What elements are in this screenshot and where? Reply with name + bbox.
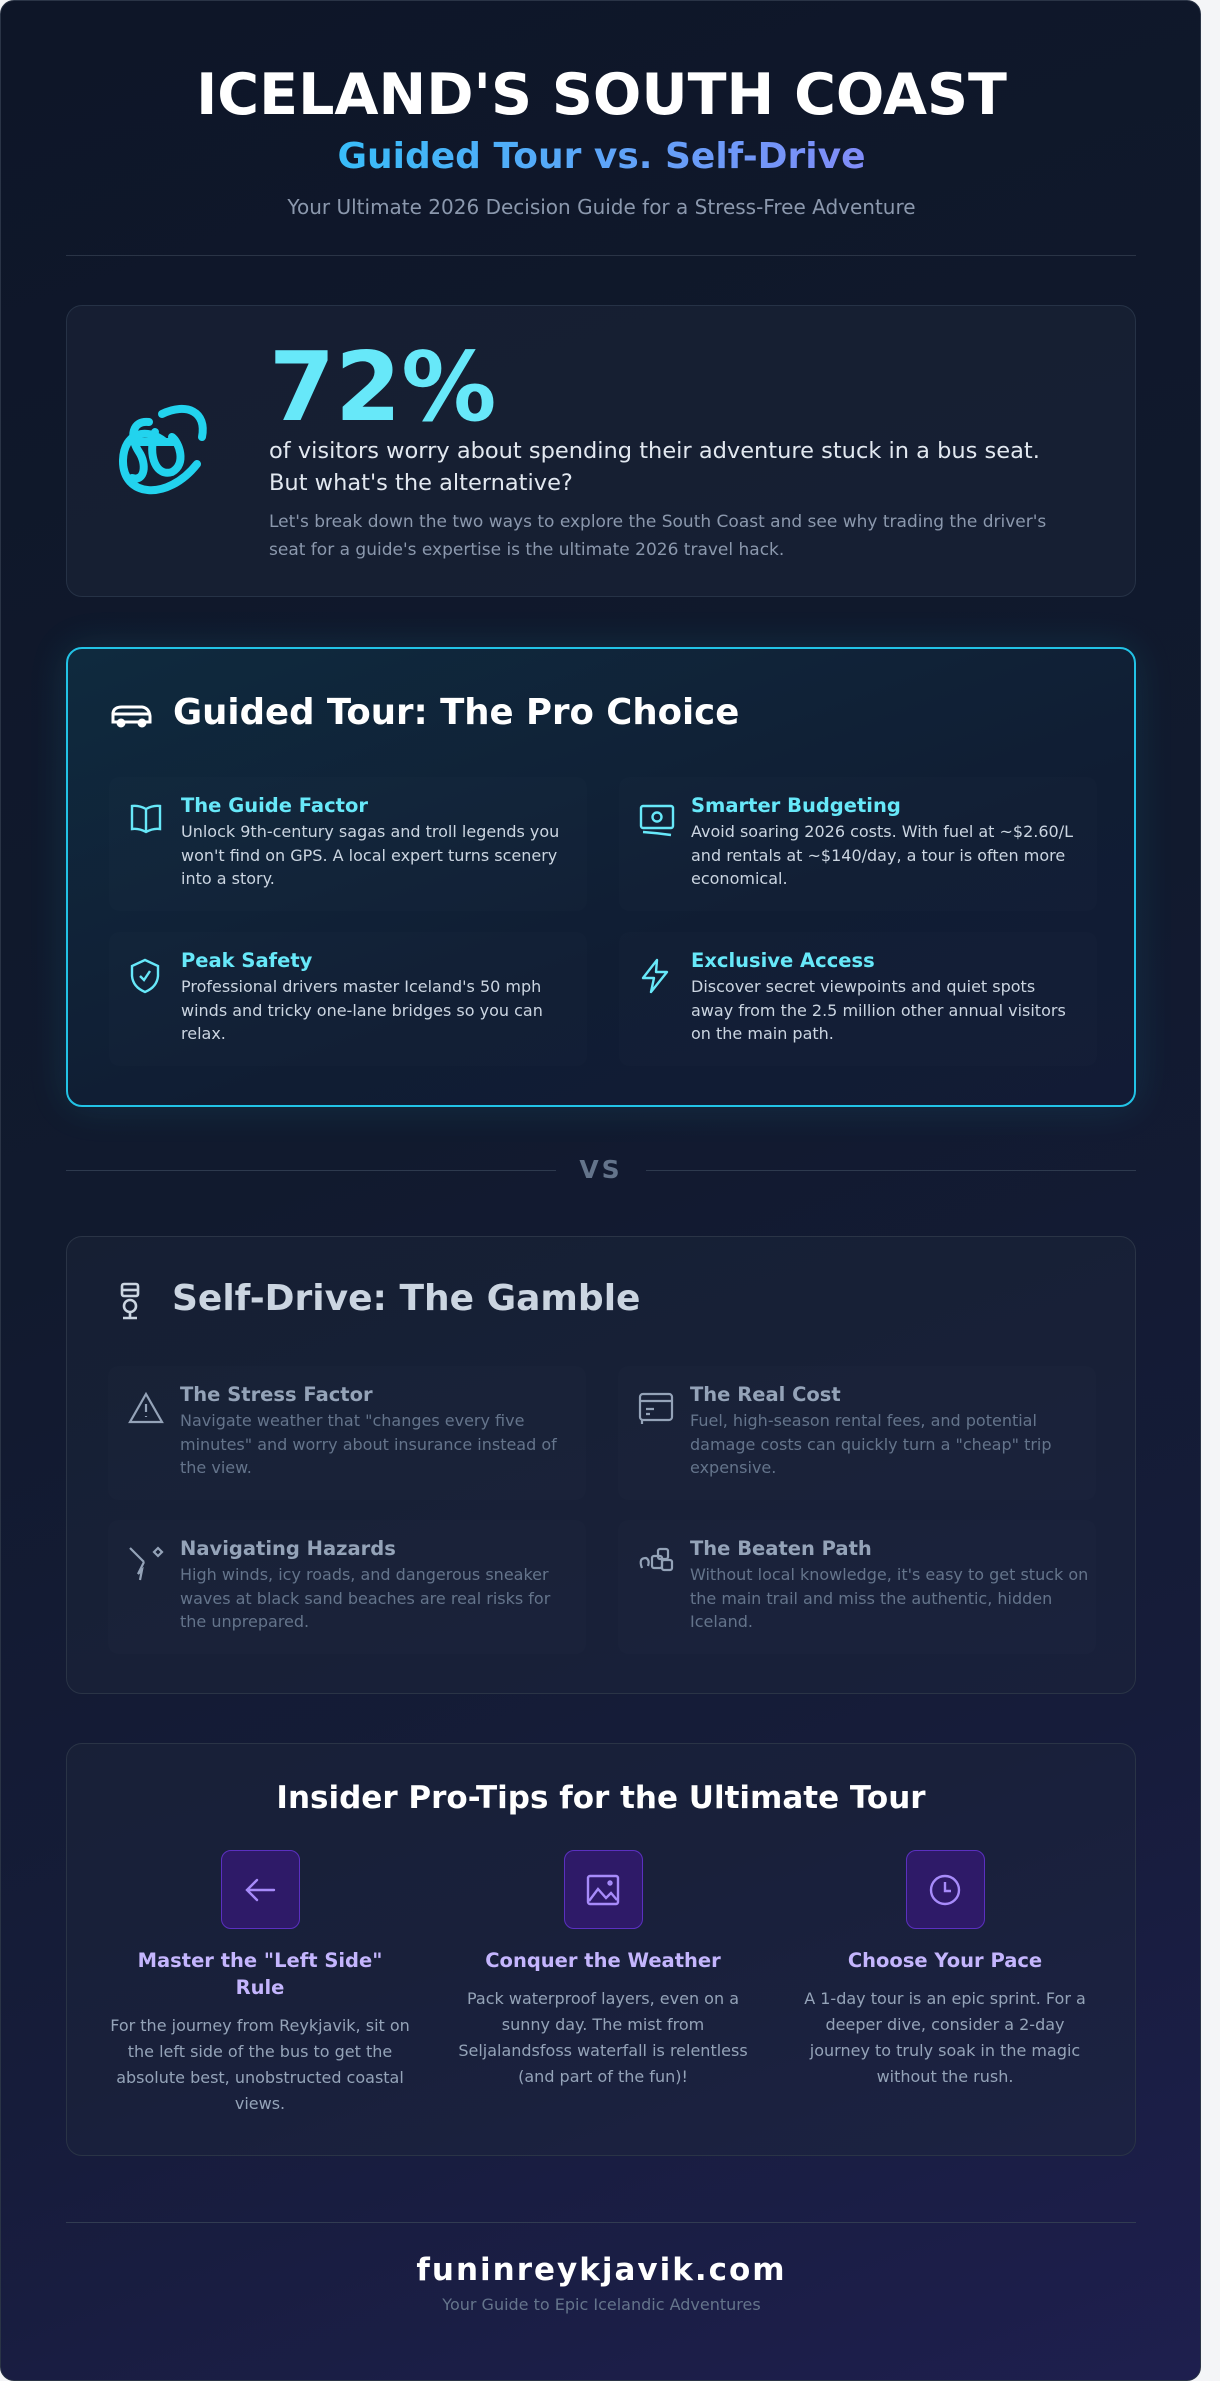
- stat text: [269, 438, 1040, 496]
- item: safety: [109, 932, 587, 1066]
- subtitle: Guided Tour vs. Self-Drive: [337, 136, 866, 177]
- item: hazards: High winds, icy roads, and dangerous sneaker waves at black sand beaches are real risks for the unprepared.: [180, 1565, 550, 1631]
- icon: van: [112, 706, 152, 728]
- stat text: But what's the alternative?: [269, 470, 573, 496]
- vs divider: VS: [579, 1155, 623, 1184]
- footer brand: funinreykjavik.com: [416, 2252, 787, 2288]
- stat paragraph: Let's break down the two ways to explore the South Coast and see why trading the driver's seat for a guide's expertise is the ultimate 2026 travel hack.: [269, 512, 1046, 560]
- icon: driver: [120, 1282, 140, 1320]
- item: guide factor: Unlock 9th-century sagas and troll legends you won't find on GPS. A local expert turns scenery into a story.: [181, 822, 559, 888]
- tip: left side: Master the "Left Side": [138, 1949, 382, 1972]
- item: access: [619, 932, 1097, 1066]
- heading: guided: Guided Tour: The Pro Choice: [173, 692, 739, 733]
- item: hazards: [108, 1520, 586, 1654]
- tip: weather: [458, 1850, 748, 2086]
- panel: stat: [66, 305, 1136, 597]
- tip: left side: [110, 1850, 410, 2113]
- tip: weather: Pack waterproof layers, even on a sunny day. The mist from Seljalandsfoss waterfall is relentless (and part of the fun)!: [458, 1989, 748, 2086]
- tip: pace: A 1-day tour is an epic sprint. For a deeper dive, consider a 2-day journey to truly soak in the magic without the rush.: [804, 1989, 1086, 2086]
- heading: self-drive: Self-Drive: The Gamble: [172, 1278, 640, 1319]
- item: budgeting: Smarter Budgeting: [691, 794, 901, 817]
- item: hazards: Navigating Hazards: [180, 1537, 396, 1560]
- icon: swirl: [119, 404, 207, 494]
- item: real cost: [618, 1366, 1096, 1500]
- tagline: Your Ultimate 2026 Decision Guide for a Stress-Free Adventure: [287, 195, 916, 219]
- tip: pace: [804, 1850, 1086, 2086]
- panel: self-drive: [66, 1236, 1136, 1694]
- big stat: 72%: [269, 333, 496, 443]
- item: beaten path: [618, 1520, 1096, 1654]
- tip: pace: Choose Your Pace: [848, 1949, 1042, 1972]
- item: guide factor: [109, 777, 587, 911]
- item: guide factor: The Guide Factor: [181, 794, 368, 817]
- item: beaten path: The Beaten Path: [690, 1537, 872, 1560]
- item: stress: Navigate weather that "changes every five minutes" and worry about insurance instead of the view.: [180, 1411, 557, 1477]
- stat text: of visitors worry about spending their adventure stuck in a bus seat.: [269, 438, 1040, 464]
- panel: guided tour: [66, 647, 1136, 1107]
- item: beaten path: Without local knowledge, it's easy to get stuck on the main trail and miss the authentic, hidden Iceland.: [690, 1565, 1088, 1631]
- footer tagline: Your Guide to Epic Icelandic Adventures: [442, 2295, 761, 2314]
- item: real cost: Fuel, high-season rental fees, and potential damage costs can quickly turn a "cheap" trip expensive.: [690, 1411, 1052, 1477]
- panel: pro-tips: [66, 1743, 1136, 2156]
- tip: weather: Conquer the Weather: [485, 1949, 721, 1972]
- tip: left side: Rule: [236, 1976, 284, 1999]
- item: stress: [108, 1366, 586, 1500]
- item: budgeting: [619, 777, 1097, 911]
- tips heading: Insider Pro-Tips for the Ultimate Tour: [276, 1780, 926, 1816]
- tip: left side: For the journey from Reykjavik, sit on the left side of the bus to get the absolute best, unobstructed coastal views.: [110, 2016, 410, 2113]
- item: access: Exclusive Access: [691, 949, 875, 972]
- item: real cost: The Real Cost: [690, 1383, 841, 1406]
- item: stress: The Stress Factor: [180, 1383, 373, 1406]
- item: access: Discover secret viewpoints and quiet spots away from the 2.5 million other annual visitors on the main path.: [691, 977, 1066, 1043]
- item: budgeting: Avoid soaring 2026 costs. With fuel at ~$2.60/L and rentals at ~$140/day, a tour is often more economical.: [691, 822, 1073, 888]
- item: safety: Professional drivers master Iceland's 50 mph winds and tricky one-lane bridges so you can relax.: [181, 977, 543, 1043]
- item: safety: Peak Safety: [181, 949, 312, 972]
- title: ICELAND'S SOUTH COAST: [196, 62, 1007, 128]
